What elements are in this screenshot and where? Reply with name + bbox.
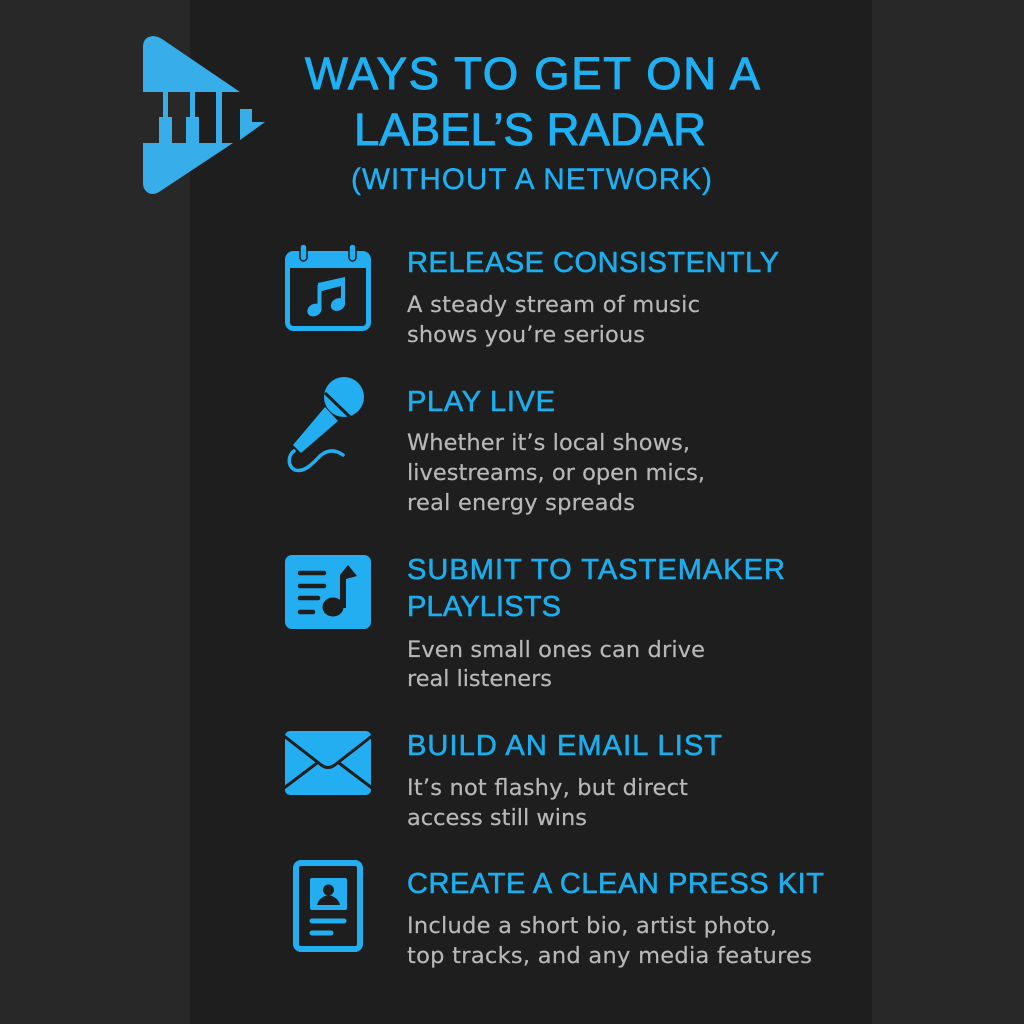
text block: release consistently <box>407 247 779 348</box>
title: LABEL’S RADAR <box>354 104 706 155</box>
text block: submit to tastemaker playlists: PLAYLISTS <box>407 591 561 623</box>
icon: calendar with music note <box>286 244 370 328</box>
text block: build an email list: BUILD AN EMAIL LIST <box>407 730 722 762</box>
title: (WITHOUT A NETWORK) <box>351 163 712 196</box>
text block: submit to tastemaker playlists: real listeners <box>407 666 552 692</box>
text block: play live: real energy spreads <box>407 490 635 516</box>
text block: build an email list <box>407 730 722 831</box>
icon: playlist with music note <box>285 555 371 629</box>
text block: submit to tastemaker playlists: SUBMIT TO TASTEMAKER <box>407 554 785 586</box>
text block: build an email list: It’s not flashy, but direct <box>407 775 688 801</box>
text block: release consistently: shows you’re serious <box>407 322 645 348</box>
text block: play live: PLAY LIVE <box>407 386 555 418</box>
text block: release consistently: RELEASE CONSISTENTLY <box>407 247 779 279</box>
title: WAYS TO GET ON A <box>305 48 761 99</box>
title <box>305 48 761 196</box>
text block: play live <box>407 386 705 516</box>
text block: create a clean press kit: top tracks, and any media features <box>407 943 812 969</box>
text block: create a clean press kit: Include a short bio, artist photo, <box>407 913 777 939</box>
text block: build an email list: access still wins <box>407 805 587 831</box>
text block: play live: Whether it’s local shows, <box>407 430 690 456</box>
icon: press kit document <box>296 863 360 949</box>
text block: submit to tastemaker playlists <box>407 554 785 692</box>
text block: create a clean press kit: CREATE A CLEAN PRESS KIT <box>407 868 824 900</box>
icon: microphone <box>289 377 364 471</box>
text block: play live: livestreams, or open mics, <box>407 460 705 486</box>
icon: play-button piano logo <box>143 36 265 194</box>
text block: release consistently: A steady stream of music <box>407 292 700 318</box>
text block: submit to tastemaker playlists: Even small ones can drive <box>407 637 705 663</box>
text block: create a clean press kit <box>407 868 824 969</box>
icon: envelope <box>284 731 372 795</box>
